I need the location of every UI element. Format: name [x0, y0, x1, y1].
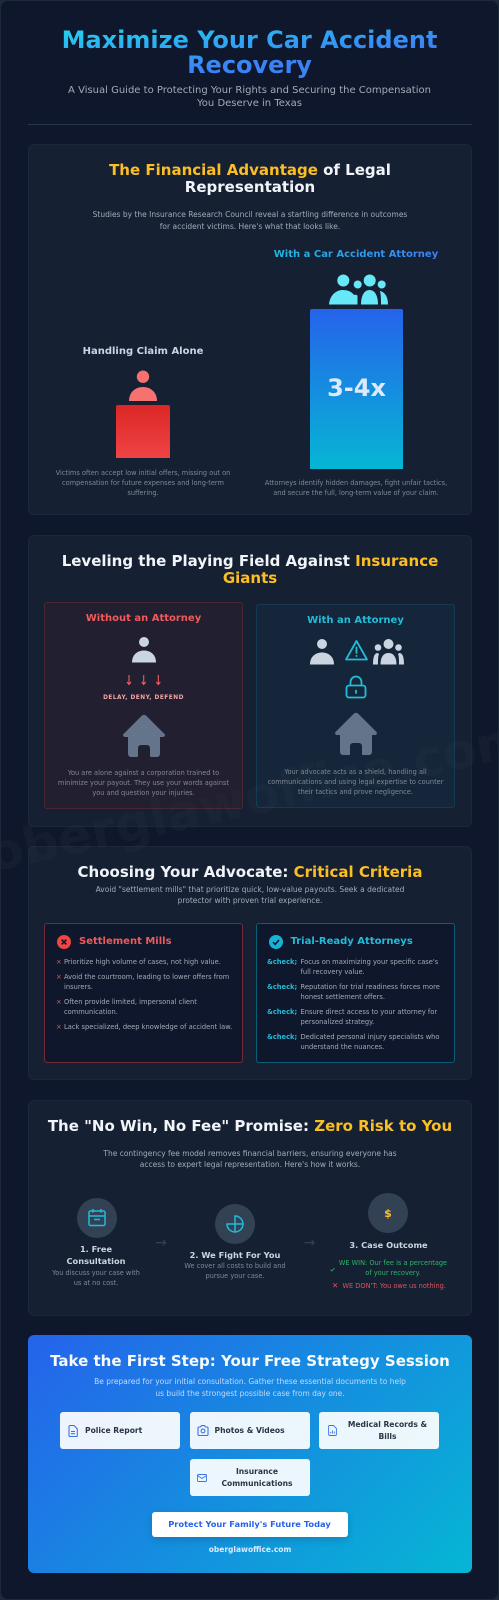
text: choosing intro: protector with proven trial experience.	[178, 896, 322, 905]
step 3 title: 3. Case Outcome	[349, 1240, 428, 1250]
text: alone outcome: compensation for future expenses and long-term	[62, 479, 224, 487]
text: call to action intro: us build the strongest possible case from day one.	[155, 1389, 345, 1398]
button: call to action: Protect Your Family's Future Today	[168, 1519, 331, 1529]
label: with attorney: With a Car Accident Attorney	[274, 249, 438, 260]
icon: calendar	[77, 1198, 117, 1238]
icon: house	[123, 714, 165, 757]
arrow: →	[155, 1235, 167, 1251]
outcome: win: WE WIN: Our fee is a percentage	[339, 1259, 447, 1267]
icon: x circle	[57, 935, 71, 949]
heading: without attorney: Without an Attorney	[86, 613, 201, 624]
step 2 text: pursue your case.	[205, 1272, 265, 1280]
icon: team	[373, 639, 404, 664]
step 1 title: Consultation	[66, 1256, 126, 1266]
icon: small check	[330, 1268, 335, 1272]
panel: trial-ready attorneys	[256, 923, 455, 1063]
panel: choosing advocate	[28, 846, 472, 1080]
text: call to action intro: Be prepared for your initial consultation. Gather these essential documents to help	[94, 1377, 406, 1386]
icon: document	[68, 1425, 78, 1437]
card: police report: Police Report	[85, 1426, 142, 1434]
panel: playing field	[28, 535, 472, 827]
heading: playing field	[62, 552, 438, 587]
text: with attorney	[268, 768, 444, 796]
card: medical records: Medical Records &	[348, 1420, 427, 1429]
bar value: 3-4x	[327, 374, 386, 402]
list: trial-ready attorneys: Dedicated personal injury specialists who	[300, 1033, 440, 1041]
text: with attorney: their tactics and prove negligence.	[298, 788, 413, 796]
list: trial-ready attorneys: honest settlement offers.	[300, 993, 385, 1001]
text: attorney outcome	[264, 479, 447, 497]
card: insurance communications: Communications	[221, 1478, 293, 1488]
icon: dollar	[368, 1193, 408, 1233]
list: trial-ready attorneys: &check;	[267, 983, 297, 991]
icon: envelope	[197, 1474, 207, 1482]
title	[0, 28, 499, 78]
icon: attorney team	[329, 274, 388, 304]
icon: down arrows	[126, 675, 161, 686]
heading: financial advantage: The Financial Advantage of Legal	[109, 161, 391, 179]
list: trial-ready attorneys: &check;	[267, 1008, 297, 1016]
text: without attorney	[58, 769, 229, 797]
text: contingency intro: access to expert legal representation. Here's how it works.	[140, 1160, 360, 1169]
subtitle: You Deserve in Texas	[197, 98, 302, 109]
step 1 title	[66, 1244, 126, 1266]
card: insurance communications: Insurance	[236, 1467, 278, 1476]
arrow: →	[304, 1235, 315, 1251]
list: settlement mills	[56, 958, 232, 1031]
heading: call to action: Take the First Step: Your Free Strategy Session	[50, 1352, 450, 1370]
step 1 text	[52, 1268, 140, 1286]
text: alone outcome: Victims often accept low initial offers, missing out on	[56, 469, 230, 477]
list: trial-ready attorneys: understand the nuances.	[300, 1043, 384, 1051]
step 1	[52, 1198, 140, 1286]
text: with attorney: communications and using legal expertise to counter	[268, 778, 443, 786]
bar: attorney	[310, 308, 403, 468]
label: delay deny defend: DELAY, DENY, DEFEND	[103, 695, 184, 701]
outcome: lose: ✕ WE DON'T: You owe us nothing.	[332, 1281, 446, 1290]
panel: without attorney	[44, 602, 243, 809]
subtitle: A Visual Guide to Protecting Your Rights and Securing the Compensation	[68, 85, 431, 96]
card: police report	[60, 1412, 180, 1449]
list: settlement mills: Lack specialized, deep knowledge of accident law.	[64, 1023, 232, 1031]
title: Maximize Your Car Accident	[62, 26, 437, 54]
list: settlement mills: ×	[56, 1023, 62, 1031]
step 3	[330, 1193, 447, 1290]
text: with attorney: Your advocate acts as a shield, handling all	[284, 768, 427, 776]
list: trial-ready attorneys: Reputation for trial readiness forces more	[300, 983, 440, 991]
list: settlement mills: communication.	[64, 1008, 118, 1016]
icon: dollar: $	[384, 1207, 392, 1220]
label: with attorney	[256, 248, 456, 262]
list: settlement mills: ×	[56, 973, 62, 981]
step 1 text: You discuss your case with	[52, 1268, 140, 1276]
list: trial-ready attorneys: &check;	[267, 958, 297, 966]
outcome: win: of your recovery.	[365, 1269, 421, 1277]
list: trial-ready attorneys: Ensure direct access to your attorney for	[300, 1008, 437, 1016]
icon: person	[132, 637, 156, 662]
step 2 title: 2. We Fight For You	[190, 1250, 280, 1260]
heading: financial advantage	[109, 161, 391, 196]
list: trial-ready attorneys	[267, 958, 440, 1051]
icon: lock	[346, 676, 366, 698]
icon: person	[310, 639, 334, 664]
text: studies intro	[93, 210, 407, 231]
heading: no win no fee: The "No Win, No Fee" Promise: Zero Risk to You	[48, 1117, 452, 1135]
outcome: win	[339, 1259, 447, 1277]
text: attorney outcome: and secure the full, long-term value of your claim.	[273, 489, 439, 497]
list: trial-ready attorneys: full recovery value.	[300, 968, 365, 976]
heading: with attorney: With an Attorney	[307, 614, 404, 626]
text: attorney outcome: Attorneys identify hidden damages, fight unfair tactics,	[265, 479, 447, 487]
heading: choosing advocate: Choosing Your Advocate: Critical Criteria	[78, 863, 422, 881]
text: call to action intro	[94, 1377, 406, 1398]
button: call to action	[152, 1512, 348, 1537]
heading: financial advantage: Representation	[185, 178, 315, 196]
card: medical records	[319, 1412, 439, 1449]
text: without attorney: minimize your payout. They use your words against	[58, 779, 229, 787]
icon: warning shield	[345, 640, 368, 660]
bar: alone	[116, 405, 170, 458]
panel: no win no fee	[28, 1100, 472, 1316]
list: settlement mills: Prioritize high volume of cases, not high value.	[64, 958, 221, 966]
text: studies intro: Studies by the Insurance Research Council reveal a startling difference in outcomes	[93, 210, 407, 219]
list: settlement mills: Often provide limited, impersonal client	[64, 998, 197, 1006]
heading: playing field: Leveling the Playing Field Against Insurance	[62, 552, 438, 570]
list: trial-ready attorneys: Focus on maximizing your specific case's	[300, 958, 438, 966]
panel: financial advantage	[28, 144, 472, 515]
step 2	[184, 1204, 286, 1280]
card: insurance communications	[190, 1459, 310, 1496]
panel: settlement mills	[44, 923, 243, 1063]
subtitle	[68, 85, 431, 109]
step 2 text	[184, 1262, 286, 1280]
list: settlement mills: ×	[56, 998, 62, 1006]
panel: with attorney	[256, 604, 455, 808]
icon: check circle	[269, 935, 283, 949]
title: Recovery	[187, 51, 312, 79]
label: handling claim alone: Handling Claim Alone	[83, 346, 203, 356]
heading: playing field: Giants	[223, 569, 277, 587]
list: settlement mills: Avoid the courtroom, leading to lower offers from	[64, 973, 229, 981]
text: alone outcome	[56, 469, 230, 497]
step 2 text: We cover all costs to build and	[184, 1262, 286, 1270]
icon: camera	[197, 1425, 209, 1436]
text: choosing intro	[96, 884, 404, 905]
text: alone outcome: suffering.	[127, 489, 159, 497]
heading: settlement mills: Settlement Mills	[79, 936, 172, 947]
card: photos and videos	[190, 1412, 310, 1449]
list: settlement mills: insurers.	[64, 983, 93, 991]
panel: call to action	[28, 1335, 472, 1573]
text: without attorney: you and question your injuries.	[92, 789, 195, 797]
icon: medical chart document	[328, 1425, 336, 1436]
card: medical records: Bills	[378, 1432, 397, 1440]
text: contingency intro: The contingency fee model removes financial barriers, ensuring everyone has	[103, 1148, 397, 1158]
icon: pie chart	[215, 1204, 255, 1244]
icon: house	[335, 712, 377, 755]
step 1 title: 1. Free	[80, 1244, 112, 1254]
list: trial-ready attorneys: &check;	[267, 1033, 297, 1041]
list: trial-ready attorneys: personalized strategy.	[300, 1018, 374, 1026]
text: studies intro: for accident victims. Here's what that looks like.	[160, 222, 340, 231]
text: contingency intro	[103, 1148, 397, 1169]
step 1 text: us at no cost.	[74, 1278, 118, 1286]
card: photos and videos: Photos & Videos	[214, 1426, 285, 1434]
text: choosing intro: Avoid "settlement mills" that prioritize quick, low-value payouts. Seek a dedicated	[96, 884, 404, 894]
list: settlement mills: ×	[56, 958, 62, 966]
website: oberglawoffice.com	[209, 1545, 291, 1554]
icon: lone person	[129, 370, 157, 401]
text: without attorney: You are alone against a corporation trained to	[68, 769, 219, 777]
heading: trial-ready attorneys: Trial-Ready Attorneys	[290, 936, 413, 947]
